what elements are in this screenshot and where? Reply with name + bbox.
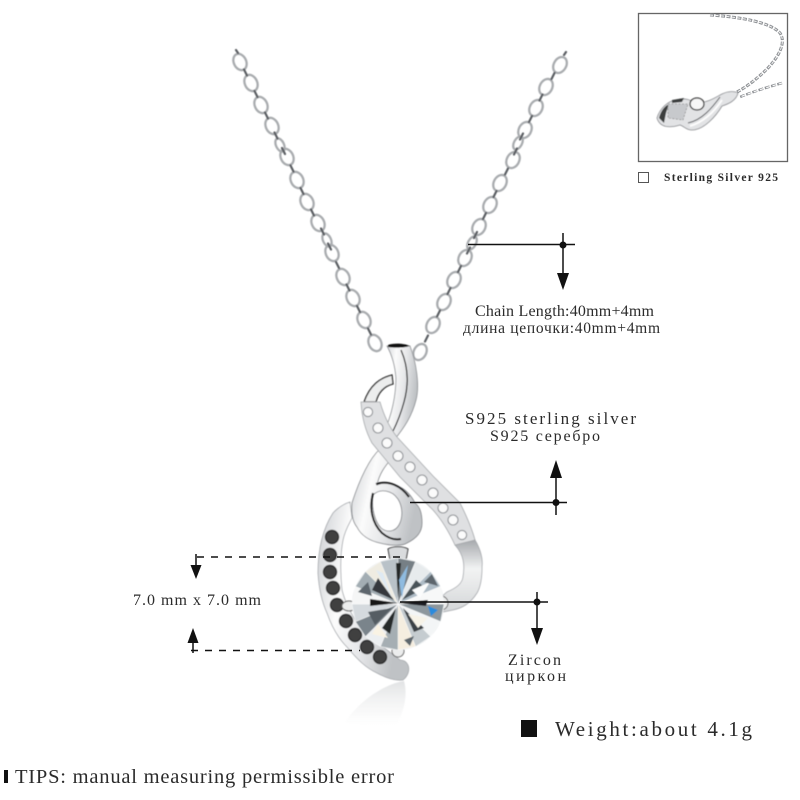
dimension: chain length leader [468,233,575,290]
tips bullet [4,770,8,783]
material label [465,409,636,445]
inset: product side view [638,14,788,162]
dimension: zircon leader [400,592,548,645]
weight bullet [521,720,537,737]
necklace chain: left strand [231,50,384,353]
bail top opening [388,344,410,348]
chain length label: длина цепочки:40mm+4mm [463,320,660,337]
loop inner shadow [371,483,409,539]
inset frame [638,14,788,162]
pendant reflection [345,681,406,727]
necklace chain: right strand [411,52,570,362]
zircon label: Zircon [508,652,561,669]
chain length label [463,303,660,337]
material label: S925 серебро [490,428,600,445]
right lobe band [440,540,482,612]
round zircon stone [352,558,444,650]
dimension: stone size top dashed leader [190,554,400,579]
dimension: silver leader [410,460,567,515]
pave stones [363,407,467,540]
inset pendant [657,92,738,130]
zircon label [505,652,566,685]
weight note: Weight:about 4.1g [555,717,752,741]
lower ribbon and loop [352,449,422,545]
black stones [323,530,387,664]
inset caption: Sterling Silver 925 [664,172,778,184]
pendant [318,344,482,727]
ribbon highlight line [393,350,407,431]
caption checkbox [638,172,648,182]
stone facets: dark and blue highlights [358,563,438,646]
pave band [361,402,475,545]
left teardrop band with black stones [318,502,409,680]
chain length label: Chain Length:40mm+4mm [475,303,655,320]
inset second chain [740,83,782,97]
main ribbon: bail to mid crossing [384,346,418,440]
side prongs [342,596,448,657]
stone size label: 7.0 mm x 7.0 mm [133,592,262,609]
zircon label: циркон [505,668,566,685]
inset chain [710,15,782,92]
tips note: TIPS: manual measuring permissible error [15,766,394,788]
material label: S925 sterling silver [465,409,636,428]
dimension: stone size bottom dashed leader [188,628,360,653]
upper back strand [364,375,393,402]
stone setting bail [388,547,408,560]
